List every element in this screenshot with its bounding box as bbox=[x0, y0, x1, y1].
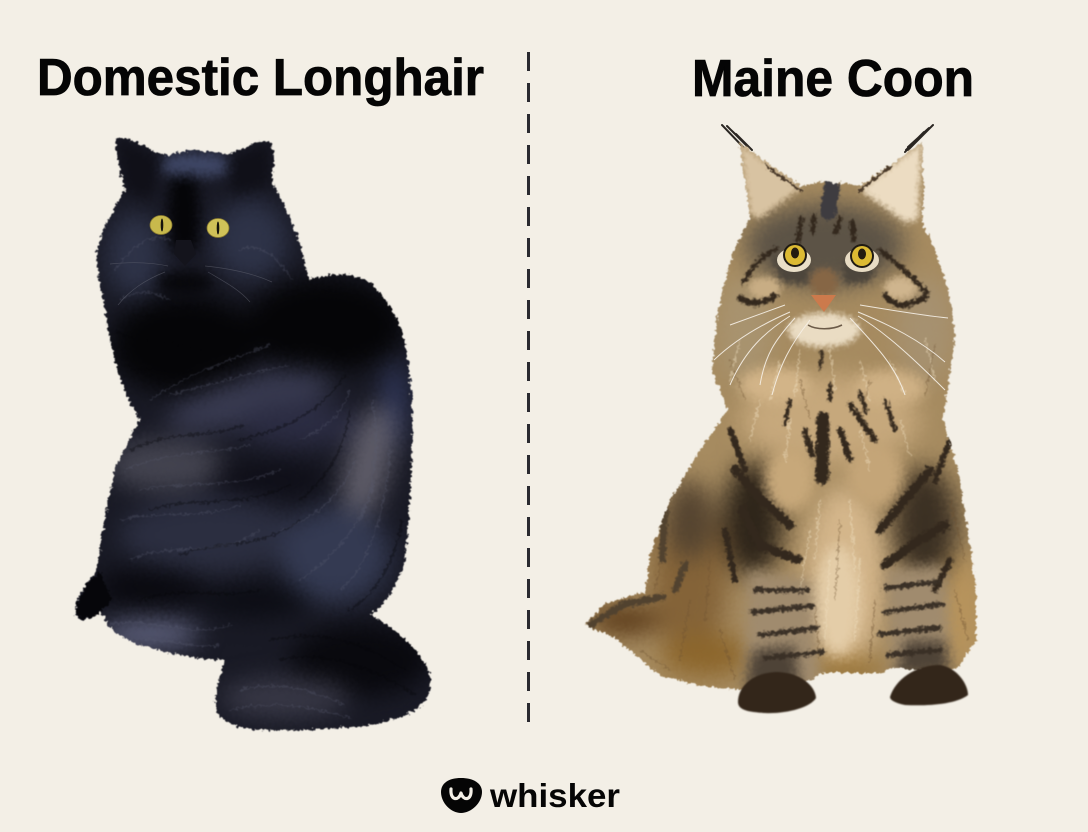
fur strands, dark bbox=[129, 370, 414, 694]
title: Domestic Longhair: Domestic Longhair bbox=[37, 49, 484, 107]
ear tufts bbox=[722, 125, 933, 152]
tabby stripes bbox=[590, 186, 950, 658]
dashed divider bbox=[527, 52, 530, 723]
fur strands bbox=[730, 340, 935, 640]
icon: tabby face bbox=[714, 243, 948, 395]
icon: paws bbox=[738, 665, 968, 713]
logo: whisker bbox=[441, 777, 620, 814]
illustration: black domestic longhair cat bbox=[73, 136, 432, 732]
illustration: tabby Maine Coon cat bbox=[570, 120, 990, 713]
legs bbox=[739, 367, 950, 690]
icon: black cat eyes and nose bbox=[110, 216, 272, 305]
title: Maine Coon: Maine Coon bbox=[692, 50, 974, 108]
fur strands, light bbox=[110, 237, 390, 718]
ear rims bbox=[765, 165, 892, 192]
wordmark: whisker bbox=[489, 777, 620, 814]
icon: whisker blob bbox=[441, 778, 482, 813]
